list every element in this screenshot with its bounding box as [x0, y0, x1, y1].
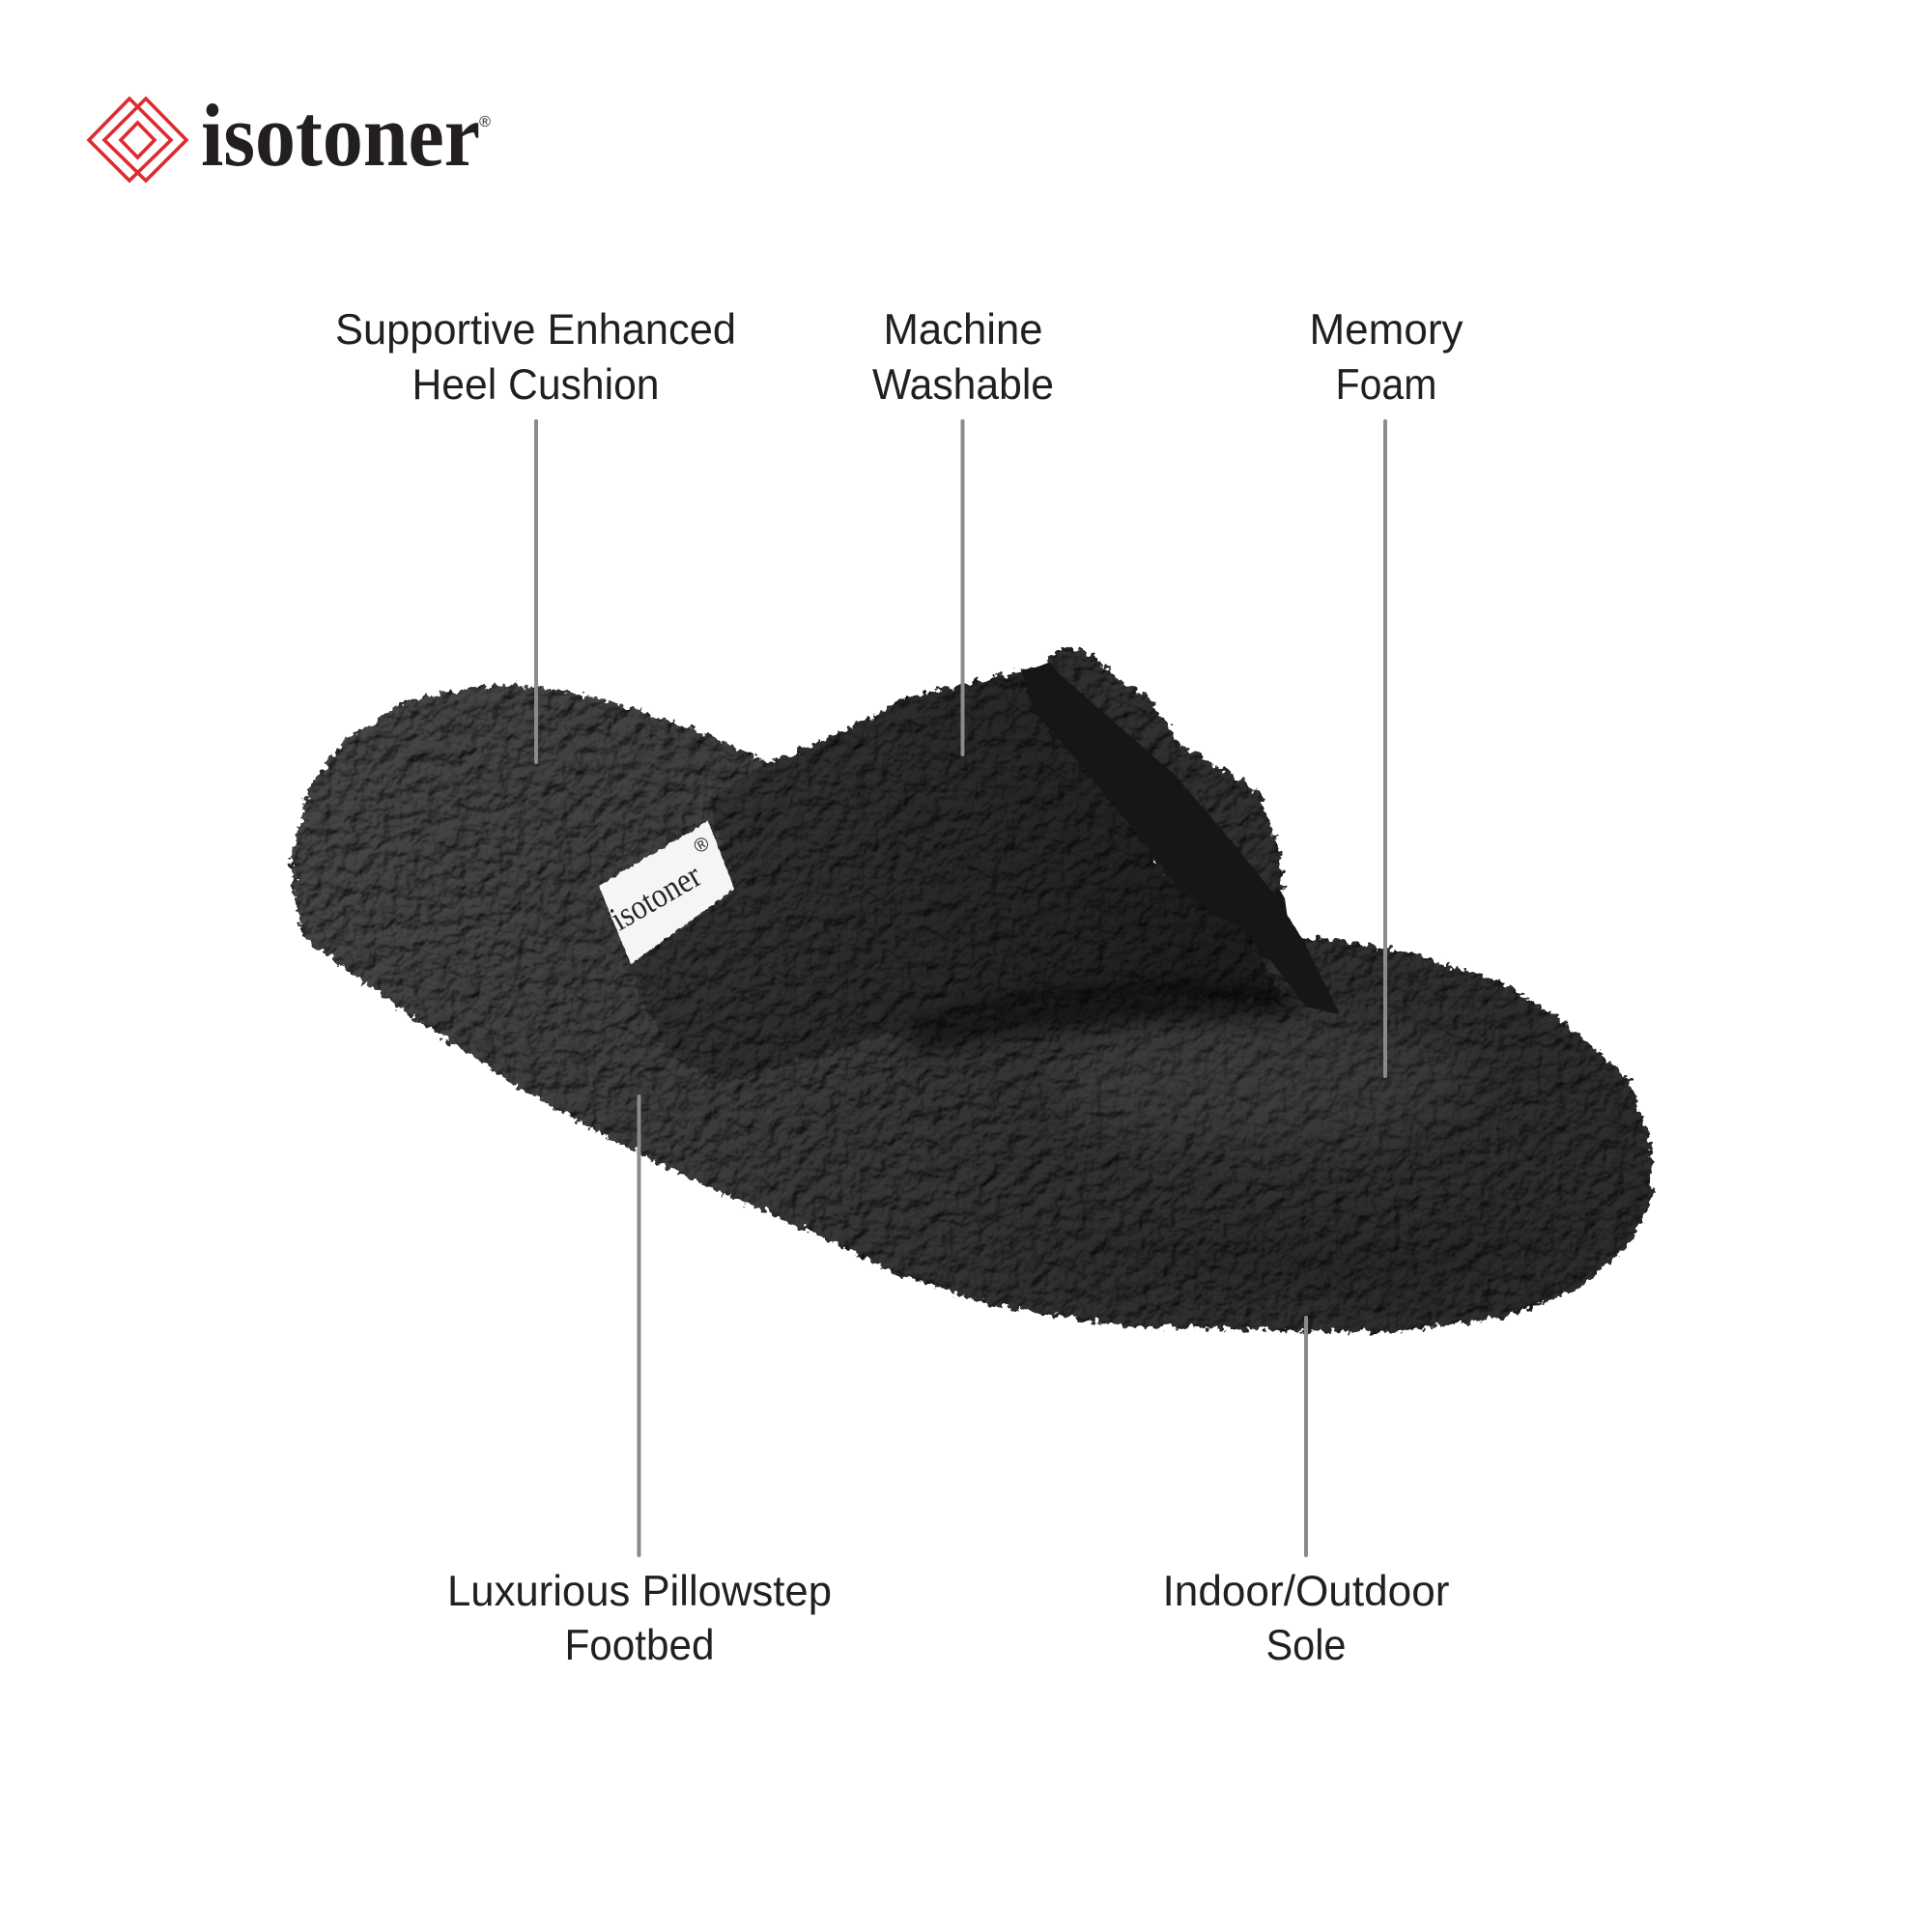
- callout: Machine Washable: [872, 306, 1054, 754]
- callout: Machine Washable: Washable: [872, 361, 1054, 409]
- callout: Machine Washable: Machine: [883, 306, 1043, 354]
- fluffy strap: [628, 669, 1285, 1084]
- callout: Indoor/Outdoor Sole: Indoor/Outdoor: [1163, 1568, 1450, 1615]
- woven label: [599, 821, 734, 964]
- logo wordmark: isotoner: [201, 86, 480, 185]
- callout: Luxurious Pillowstep Footbed: Luxurious Pillowstep: [447, 1568, 832, 1615]
- shadow under strap: [908, 985, 1294, 1053]
- callout: Memory Foam: Foam: [1335, 361, 1437, 409]
- callout: Supportive Enhanced Heel Cushion: Supportive Enhanced: [335, 306, 736, 354]
- callout: Memory Foam: Memory: [1310, 306, 1463, 354]
- logo: isotoner: [89, 86, 491, 185]
- sole front edge shading: [1014, 1169, 1594, 1285]
- logo registered mark: ®: [479, 114, 491, 130]
- slipper sole and footbed: [290, 686, 1653, 1332]
- black fabric band and thong: [1021, 665, 1340, 1014]
- footbed highlight: [1053, 1014, 1478, 1150]
- callout: Supportive Enhanced Heel Cushion: Heel Cushion: [412, 361, 659, 409]
- slipper product illustration: [290, 647, 1653, 1332]
- dark backing behind fabric band: [1014, 657, 1294, 966]
- callout: Supportive Enhanced Heel Cushion: [335, 306, 736, 762]
- callout: Memory Foam: [1310, 306, 1463, 1076]
- icon: red diamond mark: [89, 99, 186, 181]
- outer strap top rim: [1046, 647, 1283, 894]
- label text: isotoner: [604, 856, 707, 938]
- callout: Indoor/Outdoor Sole: Sole: [1265, 1622, 1347, 1669]
- label registered mark: ®: [690, 833, 713, 858]
- callout: Luxurious Pillowstep Footbed: [447, 1096, 832, 1669]
- inner strap band with label: [531, 763, 840, 1055]
- label fabric: [599, 821, 734, 964]
- callout: Indoor/Outdoor Sole: [1163, 1318, 1450, 1669]
- callout: Luxurious Pillowstep Footbed: Footbed: [564, 1622, 715, 1669]
